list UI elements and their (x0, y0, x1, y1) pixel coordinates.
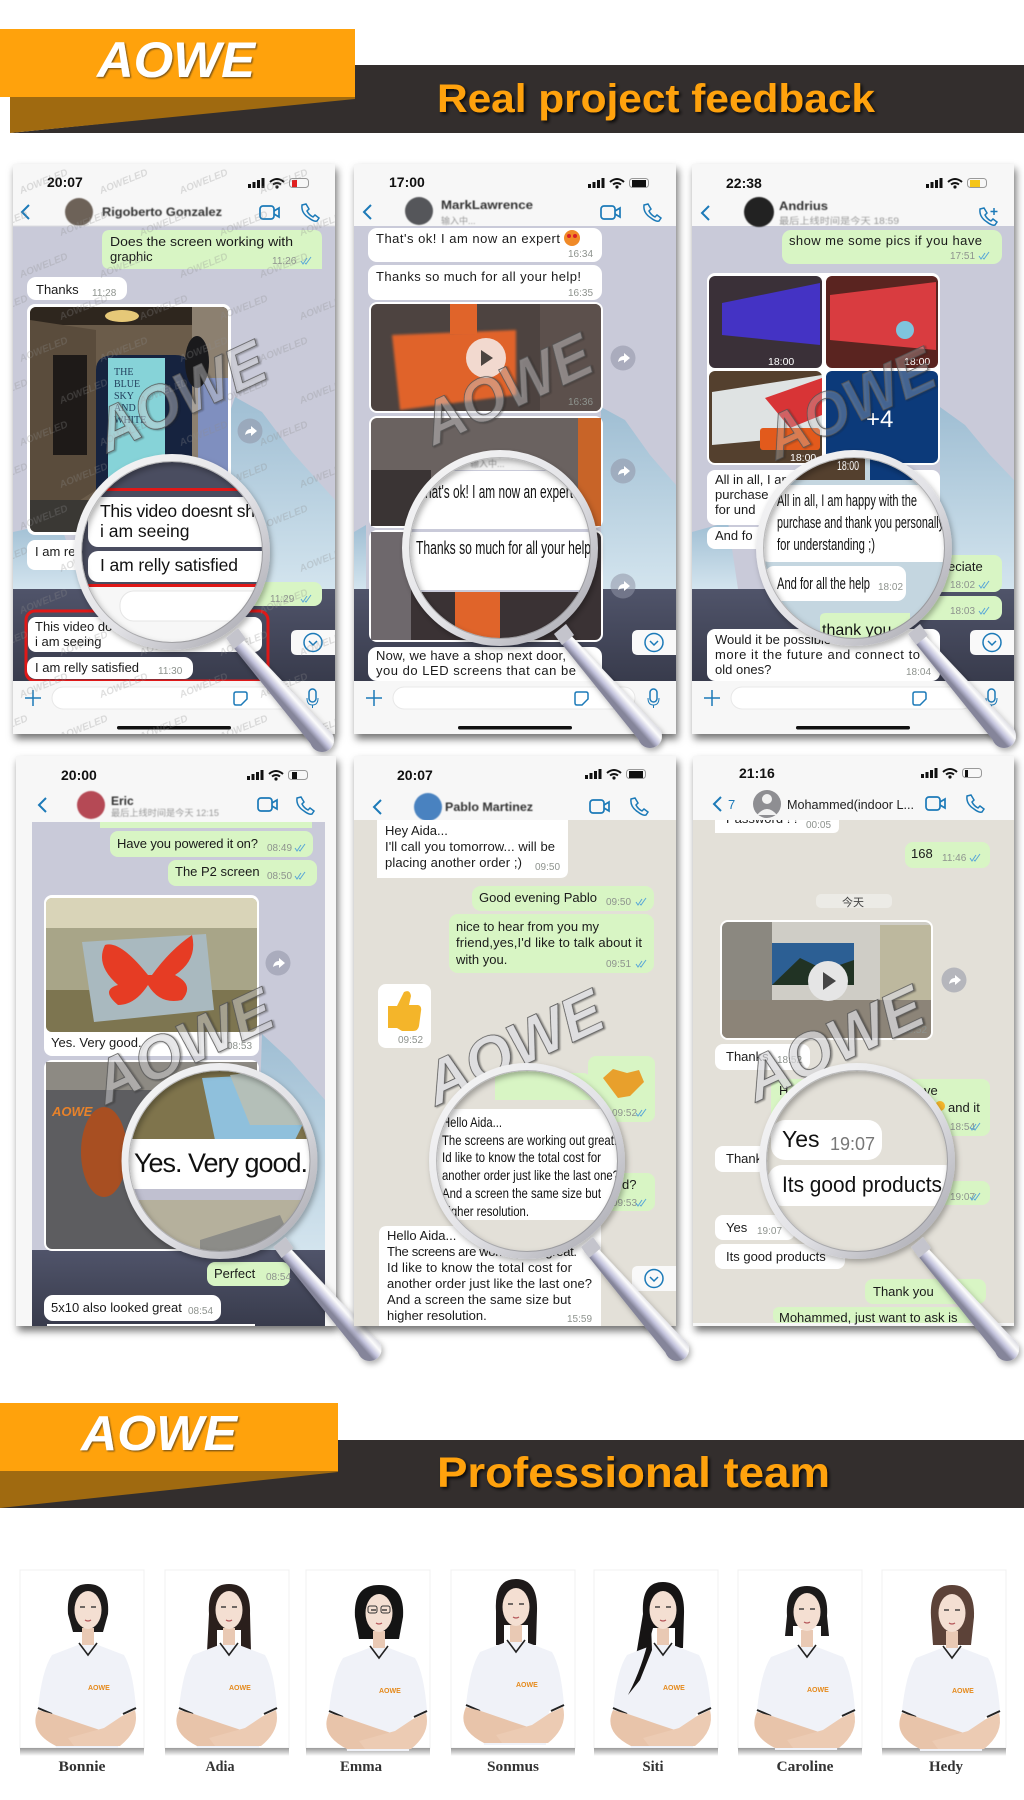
phone frame (354, 756, 676, 1326)
input bar (13, 681, 335, 734)
green message: perfect: 08:54 (266, 1272, 291, 1283)
message fragments: purchase (715, 487, 768, 502)
magnifier lens content: thank you so (822, 622, 913, 639)
phone frame (16, 756, 336, 1326)
message: thanks: Thanks (36, 282, 79, 297)
magnifier lens content: Hello Aida... (442, 1114, 502, 1130)
message: hello Aida: 15:59 (567, 1314, 592, 1325)
forward icon (942, 968, 966, 992)
chat wallpaper (354, 820, 676, 1326)
photo: hallway LED poster: SKY (114, 391, 134, 402)
card: Adia: Adia (206, 1759, 235, 1775)
green message: P2 screen (168, 860, 317, 886)
green message fragment: d? (622, 1177, 636, 1192)
panel: phone 2 chat (354, 164, 676, 748)
photo: butterfly LED screen: 08:53 (227, 1041, 252, 1052)
photo: chicken on LED screen (44, 1060, 259, 1251)
panel: phone 4 chat (16, 756, 382, 1361)
photo: hallway LED poster: WHITE (114, 415, 146, 426)
message: thanks: 11:28 (92, 288, 117, 299)
date pill: 今天 (842, 895, 864, 909)
green message: 17:51 (950, 251, 975, 262)
card: Hedy (882, 1570, 1006, 1775)
brown ribbon fold (0, 1471, 338, 1508)
orange logo ribbon (0, 29, 355, 97)
title: Professional team (437, 1449, 830, 1497)
green time fragment (930, 1181, 990, 1205)
chat header: 7 (728, 797, 735, 812)
panel: phone 5 chat (354, 756, 689, 1361)
green message: thank you: Thank you (873, 1284, 934, 1299)
card: Emma: Emma (340, 1759, 382, 1775)
magnifier lens content: And for all the help (777, 574, 870, 593)
magnifier lens content: 18:00 (837, 458, 859, 473)
green message: nice to hear: 09:51 (606, 959, 631, 970)
chat wallpaper (32, 822, 325, 1326)
chat header (702, 197, 998, 227)
chat wallpaper (693, 820, 1014, 1323)
magnifier lens content: 输入中... (470, 458, 505, 469)
chat header: Rigoberto Gonzalez (102, 205, 222, 219)
magnifier lens content: Yes. Very good. (134, 1148, 308, 1178)
green message: 168 (905, 842, 990, 868)
highlighted messages (26, 611, 268, 681)
card: Siti (594, 1570, 718, 1775)
tile: blue more-photos (826, 371, 938, 463)
green message: powered on: Have you powered it on? (117, 836, 258, 851)
magnifier (406, 454, 662, 748)
message: good products (715, 1244, 845, 1269)
magnifier lens content (82, 462, 262, 642)
green message fragment: 09:53 (612, 1198, 637, 1209)
highlighted messages: 11:30 (158, 666, 183, 677)
tile: white room with red map: 18:00 (790, 452, 816, 464)
green message: nice to hear: friend,yes,I'd like to talk about it (456, 935, 642, 950)
tile: blue more-photos: +4 (866, 406, 893, 433)
message fragments: for und (715, 502, 755, 517)
message: future screens: Would it be possible to (715, 632, 846, 647)
message: Hey Aida: Hey Aida... (385, 823, 448, 838)
logo AOWE: AOWE (95, 32, 257, 88)
status bar (397, 767, 646, 783)
magnifier lens content: I am relly satisfied (100, 555, 238, 575)
green message: perfect: Perfect (214, 1266, 256, 1281)
magnifier (78, 458, 334, 752)
magnifier lens content: All in all, I am happy with the (777, 491, 917, 510)
header: real project feedback (0, 29, 1024, 133)
message: LED shop (368, 647, 602, 681)
magnifier (433, 1067, 689, 1361)
scroll button (970, 630, 1014, 655)
video thumbnail (720, 920, 933, 1040)
green messages: 18:03 (950, 606, 975, 617)
magnifier lens content: The screens are working out great. (442, 1132, 617, 1148)
green messages: 18:02 (950, 580, 975, 591)
green message: nice to hear: nice to hear from you my (456, 919, 600, 934)
green message: P2 screen: 08:50 (267, 871, 292, 882)
message: Hey Aida (377, 820, 568, 878)
message: expert (368, 228, 602, 262)
card: Bonnie: Bonnie (58, 1759, 106, 1775)
magnifier lens content: Yes (782, 1126, 820, 1152)
orange logo ribbon (0, 1403, 338, 1471)
green time fragment: 19:07 (950, 1192, 975, 1203)
input bar (692, 681, 1014, 734)
green messages: eciate (948, 559, 983, 574)
dark bar lower strip (10, 98, 355, 133)
clipped message (715, 820, 839, 833)
date pill (816, 894, 892, 909)
message: yes: Yes (726, 1220, 748, 1235)
card: Sonmus (451, 1570, 575, 1775)
green message fragment (771, 1079, 990, 1136)
green messages (900, 555, 1002, 620)
chat header: Andrius (779, 199, 828, 213)
AOWE watermark: AOWE (752, 334, 947, 473)
magnifier lens content (130, 1071, 310, 1251)
phone frame (13, 164, 335, 734)
message fragment (27, 540, 117, 570)
message fragments: All in all, I am (715, 472, 792, 487)
phone frame (693, 756, 1014, 1326)
green message: nice to hear: with you. (455, 952, 507, 967)
highlighted messages: I am relly satisfied (35, 660, 139, 675)
phone frame (354, 164, 676, 734)
green message: powered on (100, 822, 313, 857)
green message: clipped question (773, 1307, 986, 1325)
message: thanks (27, 277, 127, 300)
message: thanks: Thanks (726, 1049, 769, 1064)
message: thanks: Thanks so much for all your help! (376, 269, 581, 284)
message: expert: That's ok! I am now an expert (376, 231, 560, 246)
tile: purple LED wall: 18:00 (768, 356, 794, 368)
green message fragment: 18:54 (950, 1122, 975, 1133)
video thumbnail 3 (369, 530, 603, 642)
message: hello Aida: Id like to know the total cost for (387, 1260, 573, 1275)
green time bubble (240, 582, 322, 606)
small repeated watermark (13, 164, 335, 734)
magnifier lens content: 18:02 (878, 582, 903, 593)
panel: phone 1 chat (13, 164, 335, 752)
message: thanks: 16:35 (568, 288, 593, 299)
chat header: MarkLawrence (441, 198, 533, 212)
highlighted messages: This video doesnt show (35, 619, 171, 634)
message: future screens: more it the future and connect to (715, 647, 920, 662)
green message: 168: 11:46 (942, 853, 967, 864)
dark title bar (355, 65, 1024, 133)
chat wallpaper (13, 226, 335, 681)
message: Hey Aida: placing another order ;) (385, 855, 522, 870)
green message fragment: ve (924, 1083, 938, 1098)
clipped message: 00:05 (806, 820, 831, 831)
status bar: 20:07 (47, 174, 83, 190)
AOWE watermark: AOWE (83, 327, 278, 466)
message: hello Aida: And a screen the same size but (387, 1292, 571, 1307)
magnifier lens content: And a screen the same size but (442, 1185, 601, 1201)
green message: powered on: 08:49 (267, 843, 292, 854)
status bar: 20:00 (61, 767, 97, 783)
status bar: 21:16 (739, 765, 775, 781)
photo: hallway LED poster (27, 304, 231, 535)
panel: phone 6 chat (693, 756, 1019, 1361)
highlighted messages: i am seeing (35, 634, 101, 649)
video thumbnail 1 (369, 302, 603, 413)
status bar (726, 175, 986, 191)
AOWE watermark: AOWE (412, 976, 616, 1119)
message: yes: 19:07 (757, 1226, 782, 1237)
green message fragment: and it (948, 1100, 980, 1115)
magnifier lens content (767, 1079, 947, 1250)
chat wallpaper (692, 226, 1014, 681)
message: 5x10 (44, 1295, 255, 1326)
photo grid (707, 273, 940, 465)
message: hello Aida (379, 1226, 601, 1326)
magnifier lens content: Its good products (782, 1172, 942, 1197)
magnifier lens content: hat's ok! I am now an expert (425, 482, 573, 502)
green message: Does the screen working with (110, 234, 293, 249)
magnifier lens content: 19:07 (830, 1134, 875, 1154)
message: LED shop: you do LED screens that can be (376, 663, 576, 678)
magnifier lens content: Id like to know the total cost for (442, 1149, 601, 1165)
thumbs-up sticker: 09:52 (398, 1035, 423, 1046)
status bar (47, 174, 308, 190)
magnifier lens content: i am seeing (100, 521, 190, 541)
green fragment (495, 1073, 591, 1099)
card: Caroline: Caroline (776, 1759, 834, 1775)
message: yes (715, 1215, 795, 1240)
magnifier lens content: another order just like the last one? (442, 1167, 619, 1183)
green message: 11:26 (272, 256, 297, 267)
green message: 168: 168 (911, 846, 933, 861)
magnifier lens content: higher resolution. (442, 1203, 529, 1219)
green message (102, 230, 322, 269)
status bar (61, 767, 308, 783)
green message: good evening: 09:50 (606, 897, 631, 908)
chat header: Pablo Martinez (445, 800, 533, 814)
thumbs-up sticker (378, 984, 431, 1048)
chat header (39, 791, 314, 819)
message: good products: Its good products (726, 1249, 826, 1264)
chat header: Eric (111, 794, 134, 808)
green message: good evening: Good evening Pablo (479, 890, 597, 905)
message: hello Aida: another order just like the last one? (387, 1276, 592, 1291)
magnifier lens content: for understanding ;) (777, 535, 875, 554)
message fragments (707, 470, 940, 549)
message: hello Aida: Hello Aida... (387, 1228, 456, 1243)
message: thanks (715, 1044, 810, 1070)
chat header (714, 790, 984, 818)
tile: white room with red map (709, 371, 822, 464)
logo AOWE: AOWE (80, 1407, 238, 1461)
green handshake sticker: 09:52 (612, 1108, 637, 1119)
chat header: 最后上线时间是今天 12:15 (111, 807, 219, 818)
magnifier (126, 1067, 382, 1361)
message: Hey Aida: I'll call you tomorrow... will be (385, 839, 555, 854)
video thumbnail: 18:52 (902, 1025, 927, 1036)
green message (782, 230, 1002, 264)
AOWE watermark: AOWE (409, 320, 604, 459)
chat header: 输入中... (441, 215, 476, 226)
green message: show me some pics if you have (789, 233, 982, 248)
image thumbnail 2 (369, 416, 603, 528)
forward icon (266, 950, 290, 976)
card: Emma (306, 1570, 430, 1775)
magnifier (760, 454, 1016, 748)
message: future screens: 18:04 (906, 667, 931, 678)
forward icon (238, 418, 262, 444)
photo: hallway LED poster: AND (114, 403, 136, 414)
green message: perfect (207, 1262, 291, 1286)
chat header (374, 793, 648, 821)
card: Caroline (738, 1570, 862, 1775)
status bar: 20:07 (397, 767, 433, 783)
green handshake sticker (588, 1056, 655, 1122)
scroll button (291, 630, 335, 655)
photo: hallway LED poster: THE (114, 367, 133, 378)
message: LED shop: Now, we have a shop next door, (376, 648, 566, 663)
magnifier lens content (437, 1071, 617, 1251)
AOWE watermark: AOWE (732, 972, 936, 1115)
message: thanks: 18:52 (777, 1055, 802, 1066)
phone frame (692, 164, 1014, 734)
input bar (354, 681, 676, 734)
photo: butterfly LED screen: Yes. Very good. (51, 1035, 142, 1050)
photo: butterfly LED screen (44, 895, 259, 1056)
magnifier (763, 1067, 1019, 1361)
message: hello Aida: The screens are working out great. (387, 1244, 577, 1259)
green message: good evening (472, 886, 654, 911)
green message: thank you (865, 1279, 986, 1304)
status bar (389, 174, 648, 190)
photo: hallway LED poster: BLUE (114, 379, 140, 390)
video thumbnail 1: 16:36 (568, 397, 593, 408)
message fragment: I am re (35, 544, 75, 559)
message: hello Aida: higher resolution. (387, 1308, 487, 1323)
green message: nice to hear (449, 914, 654, 973)
message fragment (715, 1146, 805, 1172)
message: future screens (707, 629, 940, 681)
message fragment: Thanks (726, 1151, 769, 1166)
card: Sonmus: Sonmus (487, 1759, 539, 1775)
chat header: Mohammed(indoor L... (787, 797, 914, 812)
magnifier lens content (764, 458, 944, 638)
chat header: 最后上线时间是今天 18:59 (779, 215, 899, 226)
panel: team members (20, 1570, 1006, 1775)
status bar: 17:00 (389, 174, 425, 190)
green message fragment (590, 1173, 655, 1211)
message: future screens: old ones? (715, 662, 771, 677)
brown ribbon fold (10, 97, 355, 133)
photo: chicken on LED screen: AOWE (51, 1104, 93, 1119)
green message: graphic (110, 249, 153, 264)
card: Adia (165, 1570, 289, 1775)
card: Siti: Siti (642, 1759, 664, 1775)
card: Bonnie (20, 1570, 144, 1775)
message: thanks (368, 265, 602, 300)
dark title bar (0, 1440, 1024, 1508)
AOWE watermark: AOWE (81, 975, 285, 1117)
magnifier lens content (410, 458, 590, 638)
message: 5x10: 08:54 (188, 1306, 213, 1317)
clipped message: Password ! ! (726, 811, 798, 826)
status bar: 22:38 (726, 175, 762, 191)
message: Hey Aida: 09:50 (535, 862, 560, 873)
message: expert: 16:34 (568, 249, 593, 260)
green message: clipped question: Mohammed, just want to ask is (779, 1310, 958, 1325)
scroll button (632, 1266, 676, 1291)
message fragments: And fo (715, 528, 753, 543)
tile: purple LED wall (709, 276, 822, 368)
header: professional team (0, 1403, 1024, 1508)
tile: red LED wall: 18:00 (904, 356, 930, 368)
magnifier lens content: Thanks so much for all your help (416, 538, 591, 558)
message: 5x10: 5x10 also looked great (51, 1300, 182, 1315)
chat header (364, 197, 661, 226)
panel: phone 3 chat (692, 164, 1016, 748)
card: Hedy: Hedy (929, 1759, 963, 1775)
title: Real project feedback (437, 77, 876, 121)
magnifier lens content: This video doesnt sh (100, 501, 255, 521)
green time bubble: 11:29 (270, 594, 295, 605)
scroll button (632, 630, 676, 655)
status bar (739, 765, 982, 781)
tile: red LED wall (826, 276, 938, 368)
chat wallpaper (354, 226, 676, 681)
chat header (13, 198, 335, 226)
green message: P2 screen: The P2 screen (175, 864, 260, 879)
forward icons (610, 346, 636, 598)
green message fragment: H (779, 1083, 788, 1098)
